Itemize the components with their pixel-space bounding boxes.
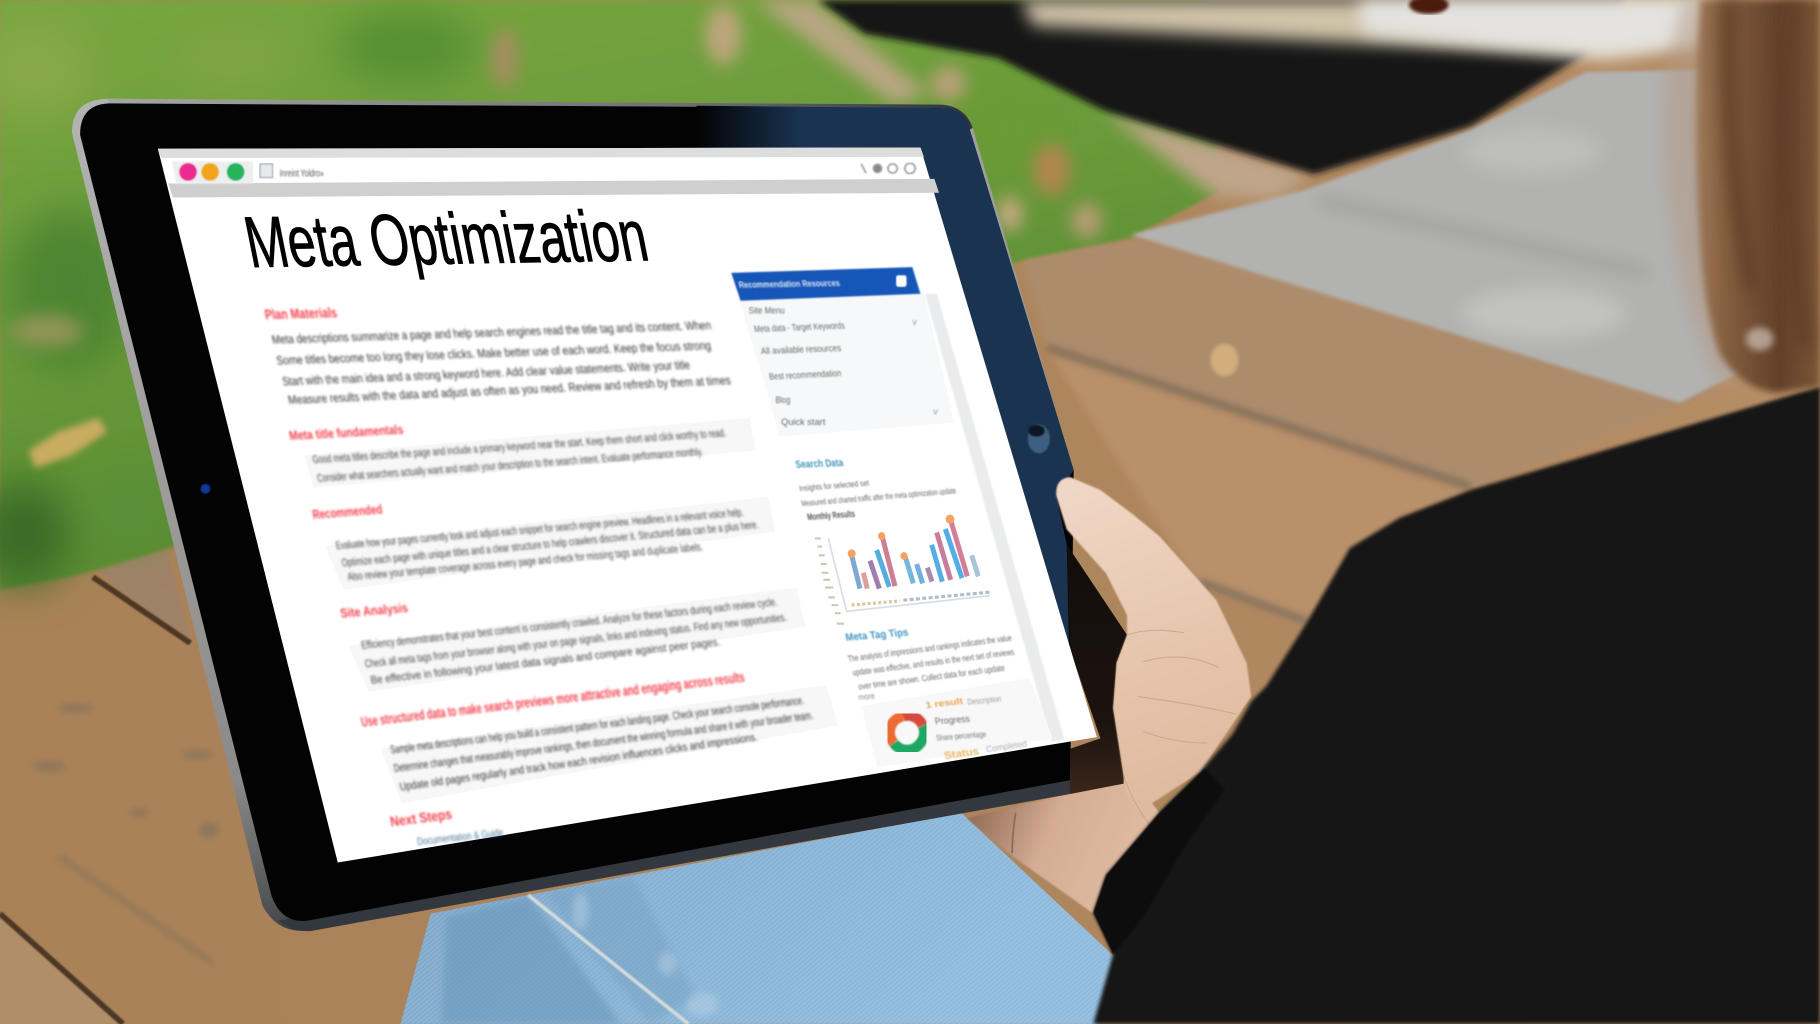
- sidebar article: heading and intro: Insights for selected set: [798, 479, 870, 493]
- section 4 body: Efficiency demonstrates that your best content is consistently crawled. Analyze for these factors during each review cycle.: [360, 596, 778, 652]
- donut chart: [890, 716, 924, 750]
- light hair wisps over slab: [1663, 0, 1741, 383]
- bar chart: [815, 515, 990, 624]
- section 4 body: [360, 596, 788, 687]
- deck board below the slab: [1021, 238, 1721, 490]
- sidebar menu items: Blog: [775, 395, 790, 405]
- section 1 body: Some titles become too long they lose clicks. Make better use of each word. Keep the focus strong: [275, 339, 712, 368]
- x axis labels: [852, 601, 900, 605]
- card text: Completed: [985, 739, 1028, 754]
- sidebar second article: over time are shown. Collect data for each update: [857, 663, 1006, 692]
- bar top markers: [848, 515, 954, 560]
- sidebar menu items: Meta data - Target Keywords: [753, 321, 846, 334]
- title: Meta Optimization: [238, 196, 654, 283]
- faint section backgrounds: [304, 418, 838, 803]
- section 1 body: [271, 318, 732, 407]
- tablet screen: [158, 148, 1097, 863]
- sidebar second article: [844, 627, 1015, 702]
- sidebar second article: more: [858, 691, 876, 702]
- section 2 body: [312, 427, 727, 485]
- black jacket with ribbed cuff: [1093, 387, 1820, 1024]
- section 5 body: Update old pages regularly and track how each revision influences clicks and impressions.: [399, 732, 759, 794]
- tablet black bezel: [80, 103, 1074, 921]
- yellow leaf on grass: [29, 418, 107, 468]
- card text: Share percentage: [935, 730, 987, 743]
- sidebar menu items: Quick start: [781, 417, 826, 427]
- sidebar navigation panel: [731, 267, 954, 437]
- section 3 body: Also review your template coverage across every page and check for missing tags and duplicate labels.: [346, 541, 704, 583]
- jeans highlights: [572, 893, 718, 1016]
- background: parked car: [818, 0, 1718, 174]
- section 5 body: Determine changes that measurably improve rankings, then document the winning formula and share it with your broader team.: [393, 710, 814, 775]
- deck board mid: [1050, 354, 1468, 627]
- sidebar menu items: v: [912, 317, 917, 327]
- section 1 body: Meta descriptions summarize a page and help search engines read the title tag and its content. When: [271, 318, 712, 347]
- background: grass lawn: [0, 0, 1312, 590]
- card text: [925, 694, 1028, 762]
- donut summary card: [861, 678, 1053, 767]
- sidebar second article: update was effective, and results in the next set of reviews: [852, 647, 1015, 678]
- section 2 body: Good meta titles describe the page and include a primary keyword near the start. Keep them short and click worthy to read.: [312, 427, 727, 466]
- background: concrete slab: [1131, 70, 1741, 403]
- car body light top: [1021, 0, 1718, 58]
- deck gaps left: [0, 577, 190, 1024]
- jeans on the lap: [400, 813, 1114, 1024]
- article text column: [263, 304, 814, 848]
- toolbar icons: [861, 163, 915, 174]
- light spot through hair: [1746, 327, 1774, 351]
- tab icon: [260, 164, 273, 178]
- blurred tan patches in grass: [9, 0, 1102, 347]
- tan path strip: [1103, 110, 1312, 200]
- card text: Status: [943, 745, 980, 762]
- browser chrome: [158, 148, 939, 197]
- brown reflection corner: [1067, 544, 1127, 794]
- fallen leaf on deck: [1211, 344, 1238, 376]
- chart axes: [828, 538, 990, 611]
- section 3 body: Optimize each page with unique titles and a clear structure to help crawlers discover it. Structured data can be a plus here.: [341, 519, 760, 570]
- hair strands: [1728, 0, 1805, 348]
- card text: 1 result: [925, 696, 964, 710]
- sidebar menu items: Best recommendation: [768, 368, 842, 382]
- tab label: Inreint Yoldro»: [280, 169, 324, 180]
- top rim: [107, 99, 973, 130]
- section 2 body: Consider what searchers actually want and match your description to the search intent. Evaluate performance monthly.: [316, 446, 704, 485]
- sidebar article: heading and intro: Measured and charted traffic after the meta optimization update: [801, 486, 957, 508]
- section 4 body: Be effective in following your latest data signals and compare against peer pages.: [370, 636, 721, 687]
- section 5 body: Sample meta descriptions can help you build a consistent pattern for each landing page. Check your search console performance.: [389, 695, 805, 756]
- wood grain specks: [32, 704, 219, 964]
- tab strip box: [172, 161, 253, 184]
- sidebar menu items: v: [933, 407, 938, 417]
- sidebar article: heading and intro: Search Data: [794, 457, 845, 471]
- sidebar header icon: [896, 275, 907, 287]
- sidebar second article: The analysis of impressions and rankings indicates the value: [847, 633, 1013, 664]
- section 1 body: Start with the main idea and a strong keyword here. Add clear value statements. Write your title: [281, 358, 691, 388]
- sidebar article: heading and intro: [794, 457, 957, 522]
- section 3 body: [335, 507, 760, 583]
- ribbed cuff: [1093, 769, 1225, 954]
- section 1 body: Measure results with the data and adjust as often as you need. Review and refresh by them at times: [287, 373, 732, 407]
- section 1 heading: Plan Materials: [263, 304, 338, 322]
- thumb and palm over tablet edge: [1056, 477, 1251, 824]
- deck gaps right: [1047, 347, 1471, 622]
- sidebar article: heading and intro: Monthly Results: [806, 509, 856, 522]
- navy reflection on bezel: [696, 106, 1074, 697]
- y axis labels: [815, 538, 844, 624]
- sidebar header: [731, 267, 920, 301]
- home button: [1028, 424, 1050, 453]
- section 4 heading: Site Analysis: [339, 600, 409, 621]
- sidebar header text: Recommendation Resources: [738, 278, 841, 290]
- section 6 link text: Documentation & Guide: [416, 827, 504, 848]
- hair: [1663, 0, 1820, 392]
- small board left: [96, 549, 193, 645]
- card text: Progress: [934, 713, 971, 726]
- traffic light buttons: [179, 163, 244, 181]
- sidebar strip: [925, 294, 1064, 742]
- section 3 body: Evaluate how your pages currently look and adjust each snippet for search engine preview. Headlines in a relevant voice help.: [335, 507, 745, 552]
- section 4 body: Check all meta tags from your browser along with your on page signals, links and indexing status. Find any new opportunities.: [364, 612, 788, 670]
- sidebar menu items: All available resources: [760, 343, 842, 356]
- jeans seam: [528, 895, 688, 1024]
- grass dark and light patches: [0, 12, 1068, 586]
- section 6 heading: Next Steps: [389, 806, 453, 830]
- section 5 body: [389, 695, 814, 794]
- tablet rim: [72, 99, 1074, 931]
- section 3 heading: Recommended: [311, 502, 384, 522]
- sidebar menu items: Site Menu: [749, 306, 785, 316]
- slab mottling: [1317, 128, 1648, 339]
- sidebar second article: Meta Tag Tips: [844, 627, 910, 644]
- palm creases: [1124, 630, 1236, 824]
- darker bottom rim: [279, 775, 1124, 931]
- jeans folds: [441, 896, 621, 1024]
- hand below tablet: [967, 778, 1160, 914]
- section 5 heading: Use structured data to make search previews more attractive and engaging across results: [360, 669, 746, 730]
- camera dot: [201, 484, 210, 494]
- tablet body: [72, 99, 1127, 931]
- sidebar menu items: [749, 306, 938, 427]
- bar series: [852, 520, 978, 589]
- tail light: [1409, 0, 1449, 14]
- section 2 heading: Meta title fundamentals: [288, 422, 405, 443]
- card text: Description: [967, 694, 1002, 707]
- lower left board wedge: [0, 914, 123, 1024]
